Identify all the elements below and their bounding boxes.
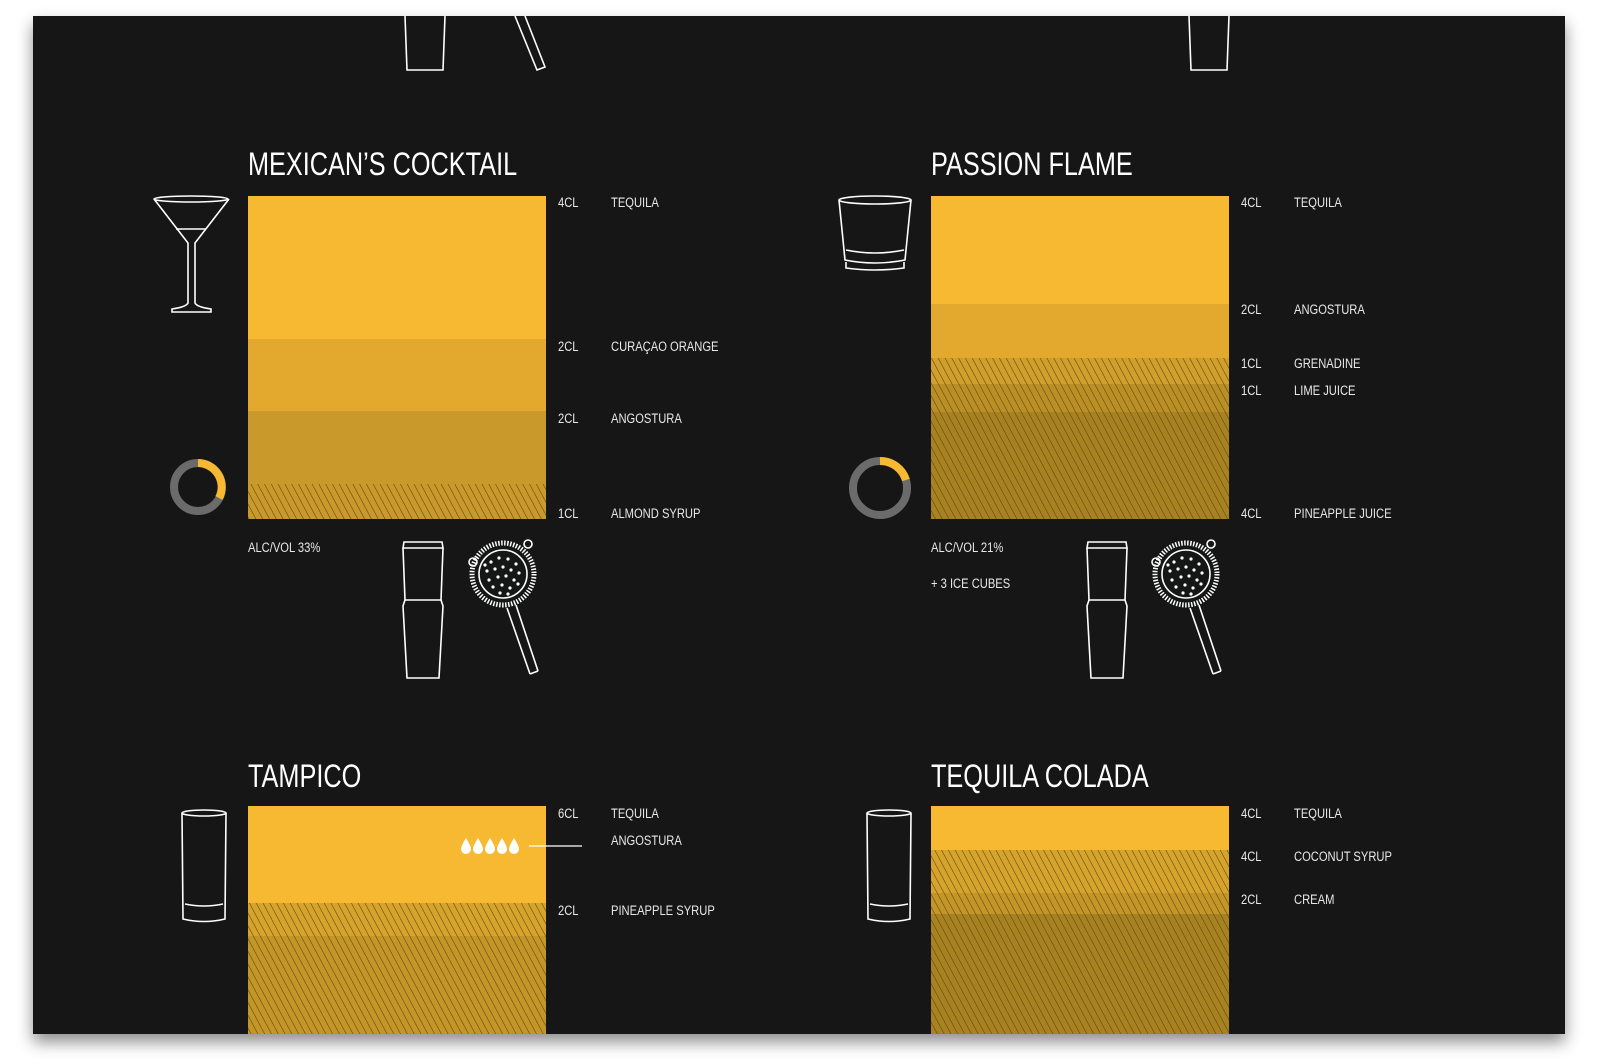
layered bar	[248, 196, 546, 519]
layered bar	[248, 806, 546, 1034]
ingredient labels: 4CL	[1241, 506, 1262, 521]
icon: shaker	[403, 542, 443, 678]
ingredient labels	[1241, 195, 1392, 521]
donut: alcohol	[853, 461, 907, 515]
ingredient labels: 1CL	[558, 506, 579, 521]
ingredient labels: ANGOSTURA	[1294, 302, 1365, 317]
ingredient labels: TEQUILA	[1294, 806, 1342, 821]
title: TAMPICO	[248, 759, 361, 795]
icon: strainer	[469, 540, 538, 674]
icon: highball glass	[867, 810, 911, 922]
ingredient labels	[558, 806, 715, 918]
icon: rocks glass	[839, 196, 911, 270]
ingredient labels: 4CL	[558, 195, 579, 210]
donut: alcohol	[174, 463, 222, 511]
ingredient labels: CURAÇAO ORANGE	[611, 339, 718, 354]
icon: martini glass	[154, 196, 229, 312]
ingredient labels: TEQUILA	[611, 195, 659, 210]
alc text	[931, 540, 1010, 591]
ingredient labels	[558, 195, 718, 521]
panel: passion flame	[839, 147, 1392, 678]
layered bar	[931, 806, 1229, 1034]
ingredient labels: 2CL	[1241, 892, 1262, 907]
panel: tequila colada	[867, 759, 1392, 1034]
ingredient labels: 4CL	[1241, 806, 1262, 821]
ingredient labels: CREAM	[1294, 892, 1334, 907]
ingredient labels: 4CL	[1241, 195, 1262, 210]
top partial icons	[405, 16, 1229, 70]
ingredient labels: GRENADINE	[1294, 356, 1360, 371]
ingredient labels: PINEAPPLE SYRUP	[611, 903, 715, 918]
ingredient labels: 2CL	[558, 411, 579, 426]
icon: drops	[461, 838, 519, 854]
ingredient labels: PINEAPPLE JUICE	[1294, 506, 1392, 521]
icon: highball glass	[182, 810, 226, 922]
alc text: + 3 ICE CUBES	[931, 576, 1010, 591]
icon: shaker	[1087, 542, 1127, 678]
title: MEXICAN’S COCKTAIL	[248, 147, 517, 183]
title: TEQUILA COLADA	[931, 759, 1149, 795]
icon: strainer	[1152, 540, 1221, 674]
layered bar	[931, 196, 1229, 519]
ingredient labels: LIME JUICE	[1294, 383, 1356, 398]
ingredient labels: ALMOND SYRUP	[611, 506, 700, 521]
ingredient labels: ANGOSTURA	[611, 411, 682, 426]
title: PASSION FLAME	[931, 147, 1133, 183]
panel: tampico	[182, 759, 715, 1034]
panel: mexican's cocktail	[154, 147, 718, 678]
alc text: ALC/VOL 33%	[248, 540, 320, 555]
ingredient labels: 4CL	[1241, 849, 1262, 864]
ingredient labels: 2CL	[558, 339, 579, 354]
ingredient labels: COCONUT SYRUP	[1294, 849, 1392, 864]
ingredient labels: 2CL	[558, 903, 579, 918]
ingredient labels: ANGOSTURA	[611, 833, 682, 848]
ingredient labels	[1241, 806, 1392, 907]
ingredient labels: 2CL	[1241, 302, 1262, 317]
ingredient labels: 1CL	[1241, 383, 1262, 398]
alc text: ALC/VOL 21%	[931, 540, 1003, 555]
ingredient labels: 6CL	[558, 806, 579, 821]
ingredient labels: TEQUILA	[611, 806, 659, 821]
ingredient labels: TEQUILA	[1294, 195, 1342, 210]
ingredient labels: 1CL	[1241, 356, 1262, 371]
